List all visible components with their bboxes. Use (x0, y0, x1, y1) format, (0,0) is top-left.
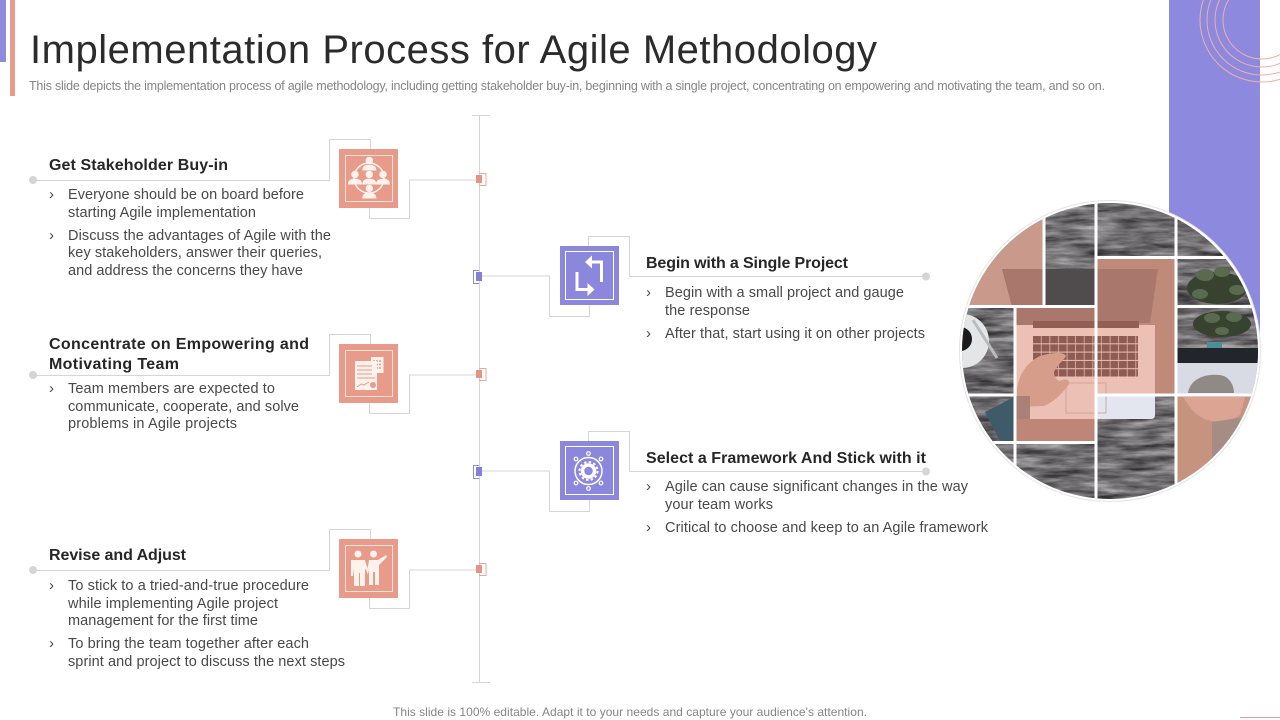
circular photo mosaic (935, 200, 1261, 502)
bullet text: Agile can cause significant changes in the way (665, 479, 969, 495)
bullet text (49, 186, 331, 279)
icon: swap arrows (560, 246, 619, 305)
coffee cup (962, 314, 998, 368)
subtitle: This slide depicts the implementation process of agile methodology, including getting stakeholder buy-in, beginning with a single project, concentrating on empowering and motivating the team, and so on. (29, 79, 1105, 93)
heading: Get Stakeholder Buy-in (49, 157, 228, 174)
step: Get Stakeholder Buy-in (29, 140, 486, 279)
bullet text: › (646, 478, 651, 495)
bullet text: › (49, 186, 54, 203)
timeline marker (474, 466, 482, 478)
timeline marker (476, 174, 486, 186)
connector dot (922, 272, 930, 280)
bullet text: problems in Agile projects (68, 416, 237, 432)
timeline marker (476, 564, 486, 576)
step: Revise and Adjust (29, 530, 486, 670)
bullet text: › (49, 227, 54, 244)
bullet text: › (646, 325, 651, 342)
bullet text: the response (665, 303, 750, 319)
bullet text: sprint and project to discuss the next steps (68, 654, 345, 670)
icon: team (339, 539, 398, 598)
laptop (1002, 269, 1158, 419)
step: Begin with a Single Project (474, 236, 930, 342)
notebook and hand (1178, 342, 1258, 458)
connector dot (29, 566, 37, 574)
bullet text: your team works (665, 497, 773, 513)
timeline marker (476, 368, 486, 380)
connector (33, 334, 477, 414)
bullet text: Begin with a small project and gauge (665, 285, 904, 301)
bullet text: Critical to choose and keep to an Agile framework (665, 520, 989, 536)
bullet text (646, 478, 989, 536)
footer note: This slide is 100% editable. Adapt it to your needs and capture your audience's attention. (393, 705, 867, 719)
icon: stakeholders (339, 149, 398, 208)
bullet text: key stakeholders, answer their queries, (68, 245, 322, 261)
connector dot (29, 176, 37, 184)
bullet text: To bring the team together after each (68, 636, 309, 652)
heading: Begin with a Single Project (646, 255, 849, 272)
jeans (985, 397, 1014, 441)
central timeline spine (472, 115, 490, 682)
bullet text: management for the first time (68, 613, 258, 629)
bullet text: › (646, 519, 651, 536)
bullet text: To stick to a tried-and-true procedure (68, 578, 309, 594)
bullet text: Everyone should be on board before (68, 187, 304, 203)
step: Concentrate on Empowering (29, 334, 486, 432)
connector (482, 432, 926, 512)
connector (482, 236, 926, 316)
connector dot (922, 468, 930, 476)
bullet text: › (49, 380, 54, 397)
mosaic gutters (960, 200, 1260, 502)
connector (33, 530, 477, 608)
bullet text: starting Agile implementation (68, 205, 256, 221)
bullet text (49, 380, 299, 432)
bullet text: Discuss the advantages of Agile with the (68, 228, 331, 244)
timeline marker (474, 270, 482, 284)
bullet text: › (49, 577, 54, 594)
icon: framework gear (560, 441, 619, 500)
plant (1187, 267, 1251, 337)
connector dot (29, 371, 37, 379)
bullet text: After that, start using it on other projects (665, 326, 925, 342)
icon: documents (339, 344, 398, 403)
pink wood tiles (968, 218, 1251, 483)
bullet text: › (646, 284, 651, 301)
bottom right accent line (1240, 717, 1280, 718)
bullet text: and address the concerns they have (68, 263, 303, 279)
bullet text: Team members are expected to (68, 381, 275, 397)
accent bar: purple (0, 0, 6, 62)
step: Concentrate on Empowering: Motivating Team (49, 356, 179, 373)
bullet text: communicate, cooperate, and solve (68, 399, 299, 415)
heading: Revise and Adjust (49, 547, 187, 564)
bullet text: while implementing Agile project (67, 596, 278, 612)
step: Select a Framework (474, 432, 989, 536)
heading: Select a Framework And Stick with it (646, 450, 927, 467)
decorative concentric arcs (1200, 0, 1280, 82)
bullet text: › (49, 635, 54, 652)
bullet text (646, 284, 925, 342)
accent bar: salmon (10, 0, 15, 96)
bullet text (49, 577, 345, 670)
decorative purple side panel (1169, 0, 1260, 340)
heading: Concentrate on Empowering and (49, 336, 309, 353)
connector (33, 140, 477, 218)
title: Implementation Process for Agile Methodology (30, 28, 877, 72)
